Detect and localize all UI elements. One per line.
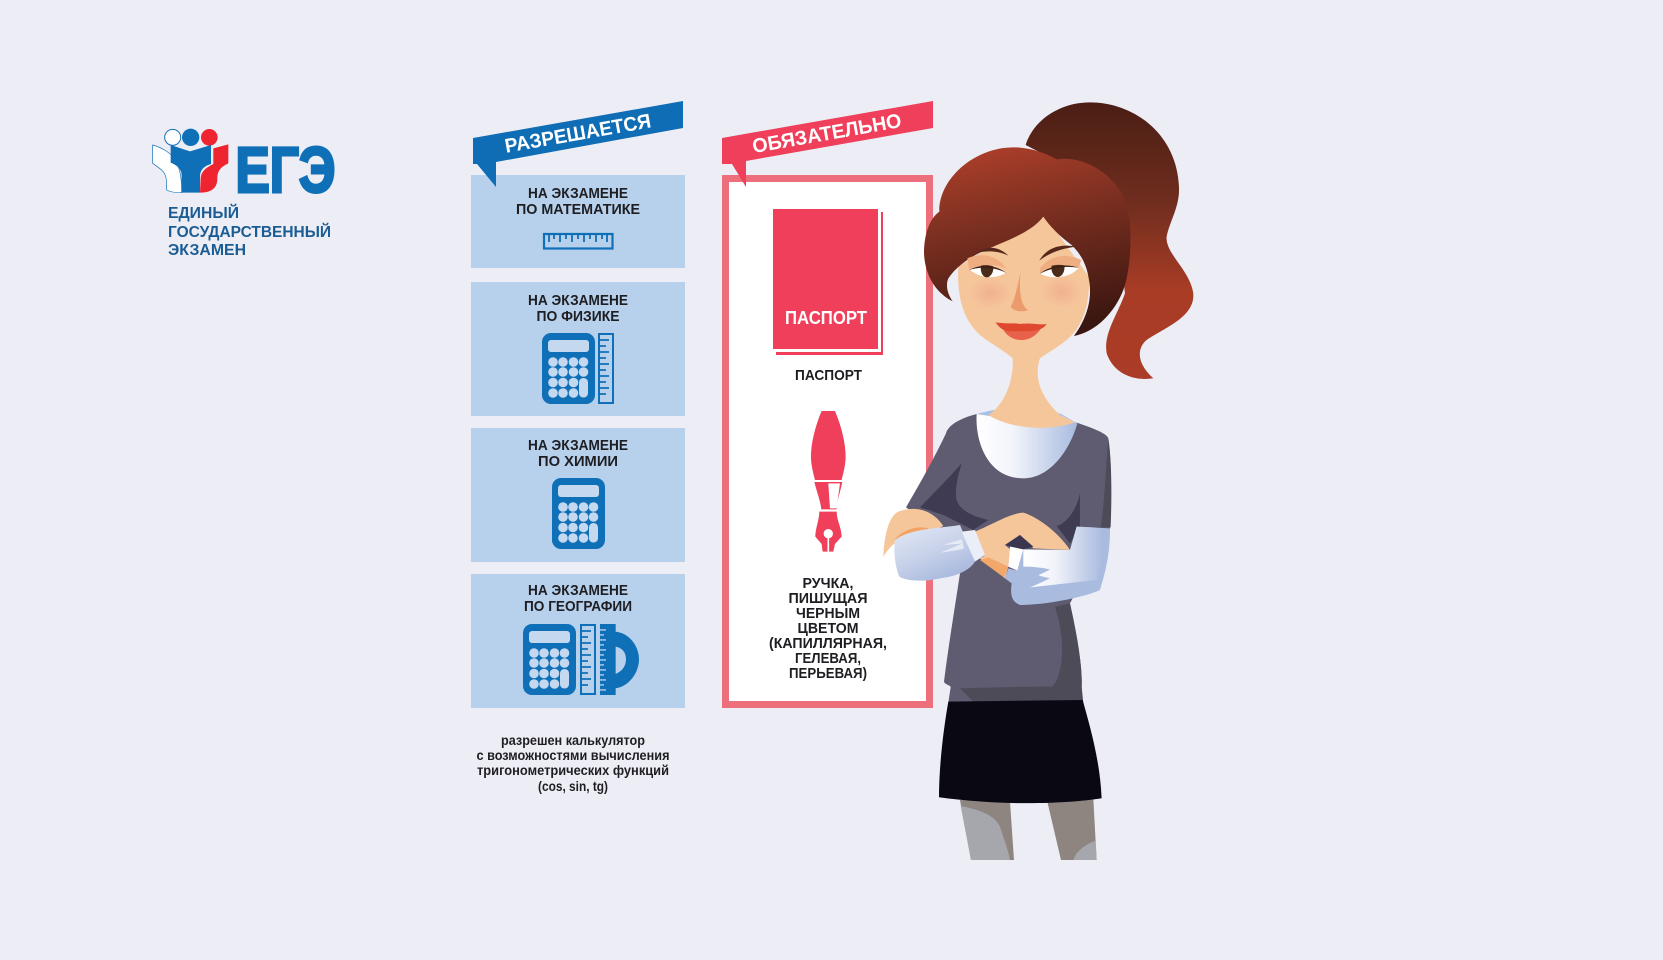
heading: math	[516, 185, 640, 218]
note: calculator capabilities: тригонометрических функций	[477, 762, 669, 778]
blush	[968, 275, 1083, 310]
ribbon: allowed	[473, 101, 683, 187]
note: calculator capabilities: разрешен калькулятор	[501, 732, 645, 748]
note: calculator capabilities	[476, 732, 670, 794]
logo subtitle: ЭКЗАМЕН	[168, 242, 246, 259]
logo emblem: three figures	[153, 129, 228, 193]
icon: ruler	[581, 625, 595, 694]
heading: physics: ПО ФИЗИКЕ	[536, 308, 620, 325]
label: pen description: (КАПИЛЛЯРНАЯ,	[769, 635, 887, 652]
label: pen description: ПЕРЬЕВАЯ)	[789, 665, 867, 682]
heading: geography	[524, 582, 632, 615]
note: calculator capabilities: с возможностями вычисления	[476, 747, 670, 763]
label: pen description	[769, 575, 887, 682]
body: sweater, skirt, legs	[883, 410, 1111, 860]
skirt	[939, 700, 1102, 803]
panel: geography	[471, 574, 685, 708]
icon: ruler	[544, 234, 612, 248]
label: pen description: РУЧКА,	[802, 575, 854, 592]
icon: calculator	[523, 624, 576, 695]
heading: math: НА ЭКЗАМЕНЕ	[528, 185, 628, 202]
head	[924, 147, 1130, 428]
icon: fountain pen	[811, 411, 846, 552]
heading: physics	[528, 292, 628, 325]
heading: chemistry: НА ЭКЗАМЕНЕ	[528, 437, 628, 454]
icon: protractor	[600, 624, 639, 695]
panel: chemistry	[471, 428, 685, 562]
logo: ЕГЭ	[153, 129, 336, 259]
label: pen description: ГЕЛЕВАЯ,	[795, 650, 861, 667]
logo subtitle: ЕДИНЫЙ	[168, 204, 239, 222]
label: pen description: ПИШУЩАЯ	[788, 590, 868, 607]
sweater	[906, 414, 1111, 703]
nose	[1011, 272, 1028, 311]
icon: calculator	[542, 333, 595, 404]
logo subtitle: ГОСУДАРСТВЕННЫЙ	[168, 223, 331, 241]
heading: geography: НА ЭКЗАМЕНЕ	[528, 582, 628, 599]
panel: math	[471, 175, 685, 268]
ribbon: required: ОБЯЗАТЕЛЬНО	[751, 110, 903, 158]
label: pen description: ЧЕРНЫМ	[796, 605, 860, 622]
heading: chemistry	[528, 437, 628, 470]
face and neck	[958, 213, 1089, 428]
icon: ruler	[599, 334, 613, 403]
logo subtitle	[168, 204, 331, 259]
collar	[977, 410, 1077, 478]
icon: passport: ПАСПОРТ	[785, 307, 868, 328]
logo wordmark: ЕГЭ	[236, 134, 336, 206]
ribbon: required	[722, 101, 933, 187]
hair	[924, 147, 1130, 336]
note: calculator capabilities: (cos, sin, tg)	[538, 778, 608, 794]
panel: required items	[726, 178, 930, 704]
ribbon: allowed: РАЗРЕШАЕТСЯ	[503, 110, 653, 158]
legs	[960, 798, 1097, 860]
lips	[996, 322, 1047, 340]
heading: chemistry: ПО ХИМИИ	[538, 453, 618, 470]
icon: passport	[773, 209, 883, 355]
label: pen description: ЦВЕТОМ	[798, 620, 858, 637]
heading: math: ПО МАТЕМАТИКЕ	[516, 201, 640, 218]
character: young woman	[883, 102, 1193, 860]
label: passport: ПАСПОРТ	[795, 367, 862, 384]
heading: geography: ПО ГЕОГРАФИИ	[524, 598, 632, 615]
heading: physics: НА ЭКЗАМЕНЕ	[528, 292, 628, 309]
icon: calculator	[552, 478, 605, 549]
eyes	[967, 246, 1081, 277]
crossed arms	[883, 509, 1110, 605]
panel: physics	[471, 282, 685, 416]
ponytail	[1026, 102, 1193, 379]
